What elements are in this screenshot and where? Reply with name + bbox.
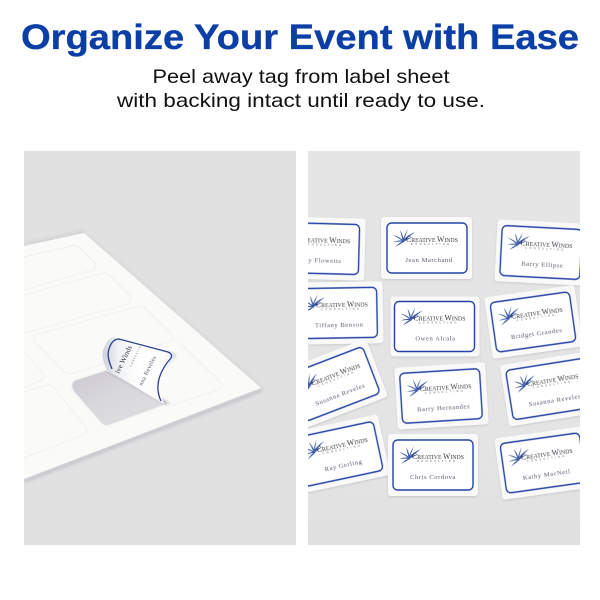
name tag: Tiffany Benson: CONSULTING: [321, 307, 359, 311]
name tag: Barry Ellipse: CREATIVE WINDS: [520, 238, 573, 250]
name tag: Jean Marchand: CONSULTING: [411, 242, 449, 246]
name tag: Mary Flowetts: Mary Flowetts: [296, 257, 342, 265]
peeled name tag: nna Reveles: [138, 355, 158, 387]
name tag: Kathy MacNeil: Kathy MacNeil: [522, 468, 571, 482]
name tag: Tiffany Benson: [308, 282, 384, 346]
name tag: Ray Gerling: Ray Gerling: [324, 458, 363, 473]
name tag: Kathy MacNeil: CONSULTING: [526, 454, 565, 463]
name tag: Susanna Reveles left: CONSULTING: [317, 371, 354, 388]
name tag: Susanna Reveles right: [500, 352, 580, 428]
name tag: Owen Alcala: Owen Alcala: [415, 336, 456, 342]
name tag: Barry Ellipse: [494, 219, 589, 286]
name tag: Bridget Grandes: CREATIVE WINDS: [510, 305, 563, 321]
empty tag window: [72, 370, 170, 426]
sheet shadow: [24, 232, 262, 481]
name tag: Ray Gerling: CREATIVE WINDS: [316, 435, 368, 454]
name tag: Barry Hernandez: CREATIVE WINDS: [419, 381, 472, 393]
name tag: Susanna Reveles left: [308, 341, 388, 428]
subtitle: [116, 66, 485, 112]
subtitle: with backing intact until ready to use.: [116, 90, 485, 112]
name tag: Barry Ellipse: Barry Ellipse: [521, 260, 564, 270]
name tag: Mary Flowetts: CONSULTING: [303, 242, 341, 247]
name tag: Chris Cordova: CONSULTING: [417, 459, 455, 463]
peeled name tag: CONSULTING: [129, 342, 144, 367]
name tag: Chris Cordova: Chris Cordova: [410, 474, 456, 481]
name tag: Kathy MacNeil: CREATIVE WINDS: [520, 446, 573, 462]
panel: scattered name tags: [308, 151, 580, 545]
name tag: Mary Flowetts: [308, 217, 366, 282]
name tag: Owen Alcala: CREATIVE WINDS: [414, 314, 466, 322]
name tag: Susanna Reveles left: CREATIVE WINDS: [310, 361, 362, 388]
name tag: Tiffany Benson: CREATIVE WINDS: [316, 299, 368, 309]
name tag: Barry Hernandez: CONSULTING: [425, 389, 463, 395]
name tag: Jean Marchand: CREATIVE WINDS: [406, 235, 458, 244]
name tag: Chris Cordova: CREATIVE WINDS: [412, 452, 464, 461]
name tag: Kathy MacNeil: [494, 426, 580, 501]
title: Organize Your Event with Ease: [21, 18, 579, 57]
peeled name tag: [103, 337, 176, 404]
name tag: Ray Gerling: [308, 414, 388, 494]
name tag: Jean Marchand: Jean Marchand: [405, 257, 453, 264]
name tag: Susanna Reveles right: CREATIVE WINDS: [526, 371, 579, 388]
name tag: Mary Flowetts: CREATIVE WINDS: [298, 235, 350, 245]
label sheet: [24, 233, 261, 479]
name tag: Jean Marchand: [381, 217, 472, 279]
name tag: Owen Alcala: CONSULTING: [418, 320, 456, 324]
name tag: Barry Ellipse: CONSULTING: [525, 246, 563, 252]
name tag: Owen Alcala: [390, 296, 480, 356]
die-cut label outlines: [24, 246, 222, 458]
name tag: Bridget Grandes: CONSULTING: [516, 313, 555, 322]
name tag: Tiffany Benson: Tiffany Benson: [315, 322, 364, 329]
name tag: Barry Hernandez: [394, 362, 489, 430]
name tag: Bridget Grandes: Bridget Grandes: [511, 327, 563, 341]
subtitle: Peel away tag from label sheet: [152, 66, 450, 88]
name tag: Susanna Reveles left: Susanna Reveles: [314, 382, 366, 408]
panel: label sheet with peeled tag: [24, 151, 296, 545]
name tag: Bridget Grandes: [484, 285, 583, 359]
name tag: Chris Cordova: [388, 434, 478, 496]
name tag: Susanna Reveles right: CONSULTING: [532, 380, 570, 390]
name tag: Barry Hernandez: Barry Hernandez: [417, 403, 471, 413]
name tag: Susanna Reveles right: Susanna Reveles: [528, 393, 582, 408]
peeled name tag: ive Winds: [113, 344, 134, 375]
name tag: Ray Gerling: CONSULTING: [322, 444, 360, 455]
